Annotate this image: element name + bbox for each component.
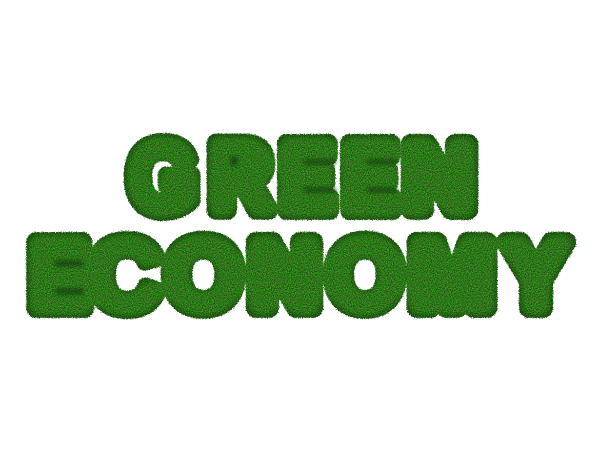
word: ECONOMY: Y (505, 222, 567, 328)
word: GREEN: N (405, 125, 474, 230)
word: GREEN: E (280, 124, 334, 230)
word: ECONOMY: M (411, 222, 493, 328)
word: ECONOMY: N (250, 223, 319, 328)
word: ECONOMY: C (89, 220, 161, 332)
word: ECONOMY: O (327, 220, 403, 330)
word: GREEN: G (128, 122, 198, 233)
shaded gaps in the letters (55, 157, 398, 294)
word: ECONOMY: O (165, 220, 242, 330)
word: ECONOMY: E (30, 223, 88, 328)
word: ECONOMY (30, 220, 567, 332)
title: GREEN ECONOMY (30, 122, 567, 332)
word: GREEN: R (210, 124, 271, 230)
word: GREEN: E (343, 124, 397, 230)
grass lettering (30, 122, 567, 332)
word: GREEN (128, 122, 474, 233)
